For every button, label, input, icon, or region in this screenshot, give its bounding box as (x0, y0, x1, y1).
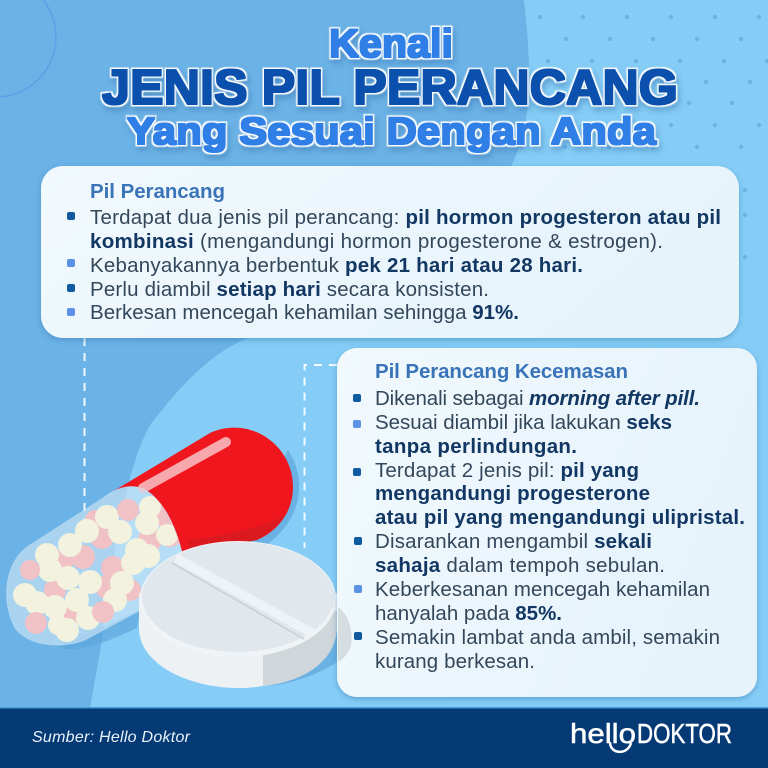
heading: Pil Perancang: Pil Perancang (90, 180, 225, 203)
logo: hello DOKTOR: DOKTOR (637, 718, 732, 749)
tablet shadow on panel (338, 607, 352, 662)
text: panel 1 points: Berkesan mencegah kehamilan sehingga 91%. (90, 301, 519, 324)
connector lines (84, 338, 337, 548)
capsule clear base (7, 486, 182, 645)
text: panel 1 points: Kebanyakannya berbentuk pek 21 hari atau 28 hari. (90, 254, 583, 277)
panel: Pil Perancang Kecemasan (337, 348, 757, 697)
capsule clear sheen (7, 486, 182, 645)
bullets (67, 212, 75, 316)
text: panel 2 points: Dikenali sebagai morning after pill. (375, 387, 700, 410)
illustration: tablet (139, 541, 345, 688)
tablet shadow (270, 625, 345, 686)
text: panel 2 points: sahaja dalam tempoh sebulan. (375, 554, 665, 577)
title: JENIS PIL PERANCANG (102, 61, 678, 115)
logo: hello DOKTOR: hello (570, 718, 636, 749)
text: panel 2 points: hanyalah pada 85%. (375, 602, 562, 625)
heading: Pil Perancang Kecemasan: Pil Perancang Kecemasan (375, 360, 628, 383)
text: panel 1 points (90, 206, 721, 324)
illustration: capsule (7, 428, 299, 649)
tablet top (140, 541, 336, 657)
title (102, 22, 678, 153)
text: panel 2 points: kurang berkesan. (375, 650, 535, 673)
text: panel 2 points: Terdapat 2 jenis pil: pil yang (375, 459, 639, 482)
capsule shadow (60, 450, 299, 649)
text: panel 1 points: Terdapat dua jenis pil perancang: pil hormon progesteron atau pil (90, 206, 721, 229)
text: panel 2 points: Sesuai diambil jika lakukan seks (375, 411, 672, 434)
panel: Pil Perancang (41, 166, 739, 338)
title: Yang Sesuai Dengan Anda (127, 111, 657, 153)
text: panel 2 points: atau pil yang mengandungi ulipristal. (375, 506, 745, 529)
decorative circle (0, 0, 56, 97)
background dot pattern (477, 17, 767, 257)
text: panel 2 points (375, 387, 745, 673)
text: panel 1 points: Perlu diambil setiap hari secara konsisten. (90, 278, 489, 301)
text: panel 2 points: Keberkesanan mencegah kehamilan (375, 578, 710, 601)
bullets (353, 394, 362, 640)
tablet side (139, 593, 337, 688)
tablet score line (176, 558, 312, 633)
source text: Sumber: Hello Doktor (32, 729, 191, 746)
capsule red half (107, 428, 293, 552)
text: panel 1 points: kombinasi (mengandungi hormon progesterone & estrogen). (90, 230, 663, 253)
title: Kenali (329, 22, 453, 66)
text: panel 2 points: tanpa perlindungan. (375, 435, 577, 458)
footer bar (0, 707, 768, 768)
capsule highlight (143, 442, 226, 488)
logo: hello DOKTOR (570, 718, 732, 752)
text: panel 2 points: mengandungi progesterone (375, 482, 650, 505)
capsule pellets (13, 496, 182, 642)
text: panel 2 points: Disarankan mengambil sekali (375, 530, 652, 553)
text: panel 2 points: Semakin lambat anda ambil, semakin (375, 626, 720, 649)
